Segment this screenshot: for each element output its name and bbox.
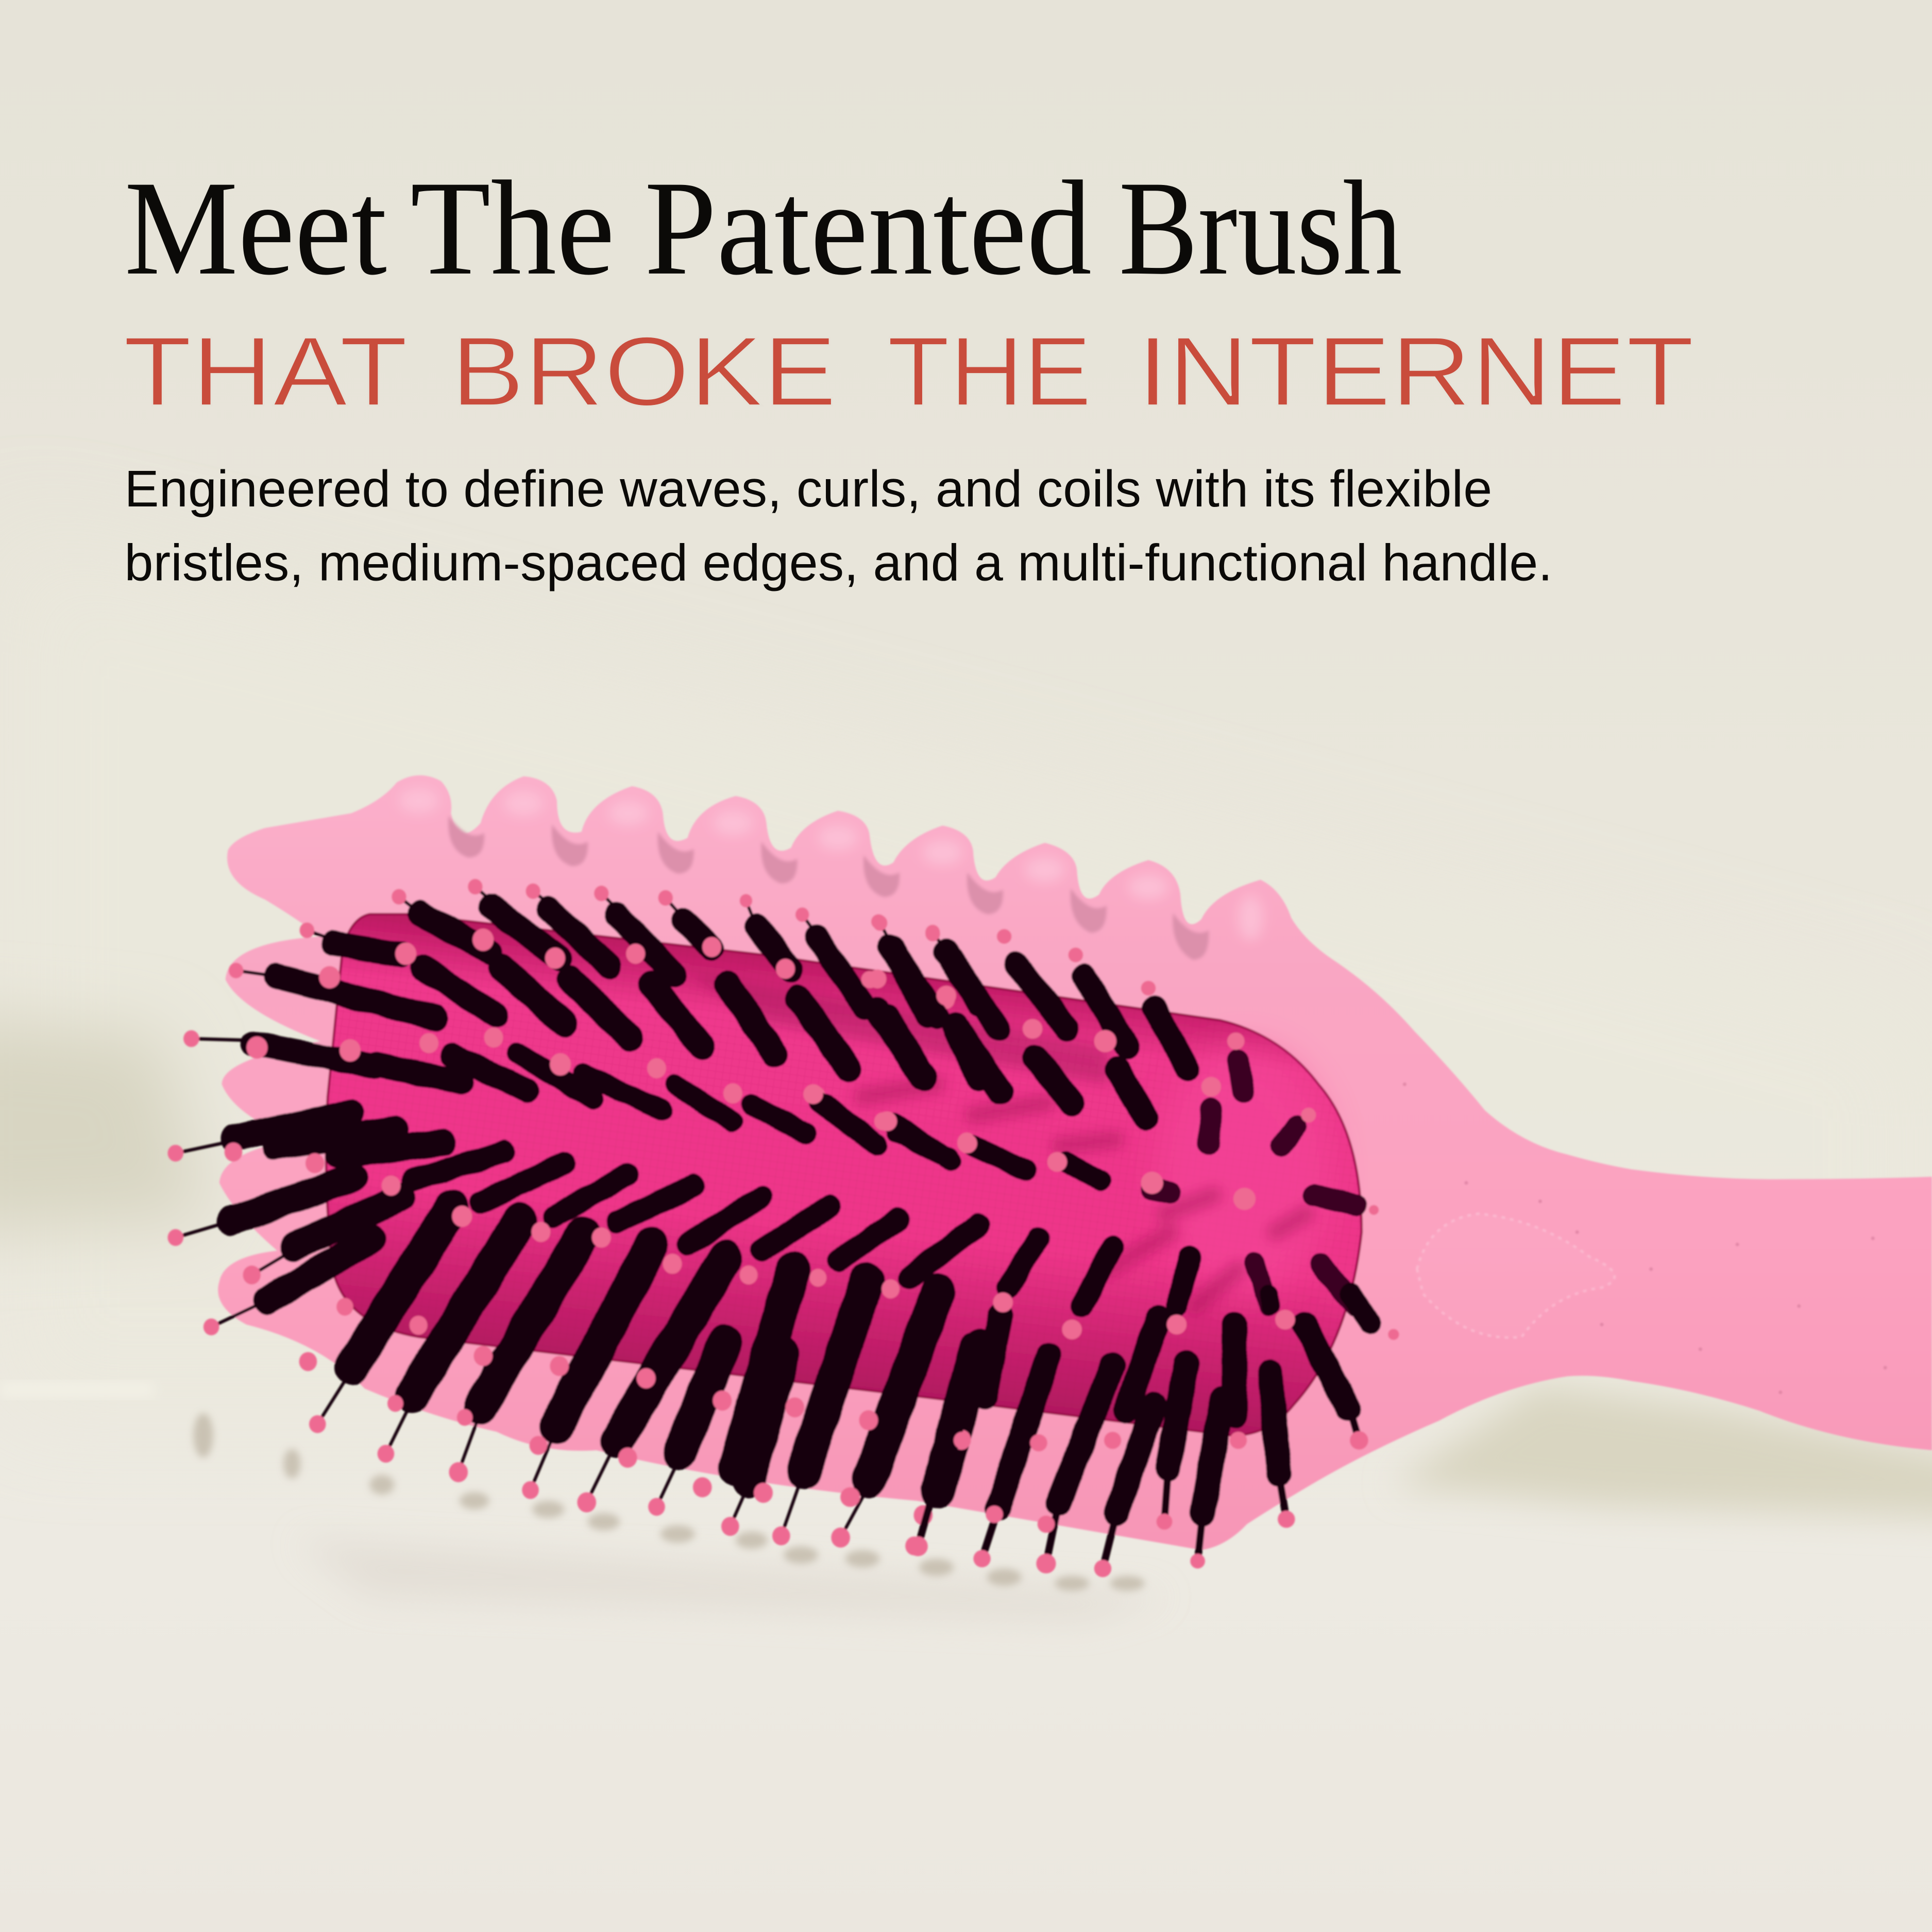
title: Patented (645, 153, 1092, 303)
title (125, 153, 1402, 303)
bristle pad (326, 914, 1362, 1435)
brush body and handle (218, 775, 1932, 1550)
lower bristle rows, left section (167, 1113, 979, 1555)
handle specks and embossed logo (1403, 1082, 1887, 1394)
lower bristle rows, right section (840, 1239, 1399, 1577)
subtitle: THAT (123, 316, 408, 427)
subtitle (123, 316, 1694, 427)
brush (167, 775, 1932, 1577)
subtitle: THE (887, 316, 1092, 427)
upper bristle rows, left section (183, 879, 979, 1158)
description text (125, 460, 1552, 591)
tuft shadows on pad (862, 1084, 1306, 1306)
description text: bristles, medium-spaced edges, and a multi-functional handle. (125, 534, 1552, 591)
tooth notches and highlights (399, 789, 1263, 960)
bristle shadows on surface (193, 1413, 1145, 1591)
upper bristle rows, right section (803, 914, 1379, 1215)
subtitle: BROKE (451, 316, 837, 427)
title: Brush (1119, 153, 1402, 303)
description text: Engineered to define waves, curls, and coils with its flexible (125, 460, 1492, 518)
subtitle: INTERNET (1137, 316, 1694, 427)
title: The (410, 153, 615, 303)
title: Meet (125, 153, 387, 303)
